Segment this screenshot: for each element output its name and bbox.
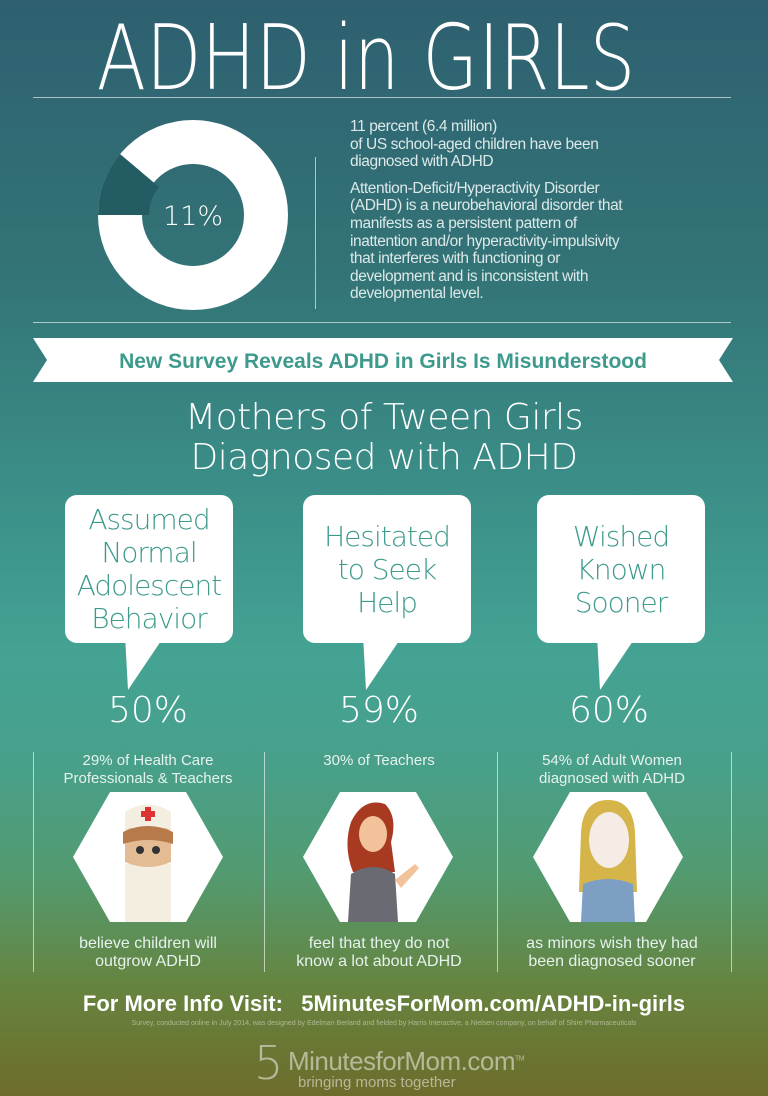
column 1 text xyxy=(64,752,232,787)
subtitle: Diagnosed with ADHD xyxy=(191,437,577,478)
donut chart 11% xyxy=(98,120,288,310)
bubble 1 xyxy=(65,495,233,690)
bubble 1: Adolescent xyxy=(77,569,221,602)
percentages: 50% xyxy=(108,690,188,731)
bubble 3 xyxy=(537,495,705,690)
text: 59% xyxy=(339,690,419,731)
text: statistic and definition xyxy=(350,118,622,302)
column 2 text: 30% of Teachers xyxy=(323,752,435,769)
column 3 text xyxy=(539,752,685,787)
text: statistic and definition: Attention-Deficit/Hyperactivity Disorder xyxy=(350,180,599,197)
logo: bringing moms together xyxy=(298,1074,456,1091)
text: statistic and definition: development and is inconsistent with xyxy=(350,268,588,285)
text: statistic and definition: diagnosed with ADHD xyxy=(350,153,493,170)
logo xyxy=(254,1036,524,1091)
donut chart 11%: 11% xyxy=(163,201,223,232)
column 1 text: Professionals & Teachers xyxy=(64,770,232,787)
logo: 5 xyxy=(254,1036,283,1090)
banner xyxy=(33,338,733,382)
bubble 2 xyxy=(303,495,471,690)
text: statistic and definition: developmental level. xyxy=(350,285,483,302)
text: feel that they do not xyxy=(309,935,449,952)
column 1 text: 29% of Health Care xyxy=(83,752,213,769)
column bottom texts xyxy=(79,935,217,970)
icon: woman hexagon xyxy=(533,792,683,922)
subtitle: Mothers of Tween Girls xyxy=(185,397,583,438)
icon: nurse hexagon xyxy=(73,792,223,922)
text: statistic and definition: that interferes with functioning or xyxy=(350,250,560,267)
bubble 2: Help xyxy=(357,586,417,618)
title: ADHD in GIRLS xyxy=(97,6,635,111)
column 3 text: 54% of Adult Women xyxy=(542,752,682,769)
text: as minors wish they had xyxy=(526,935,698,952)
column bottom texts: outgrow ADHD xyxy=(95,953,201,970)
text: statistic and definition: manifests as a persistent pattern of xyxy=(350,215,577,232)
text: statistic and definition: 11 percent (6.4 million) xyxy=(350,118,497,135)
footer call to action: For More Info Visit: 5MinutesForMom.com/ADHD-in-girls xyxy=(83,991,685,1016)
bubble 3: Sooner xyxy=(575,586,667,618)
bubble 1: Normal xyxy=(101,536,197,569)
text: been diagnosed sooner xyxy=(528,953,696,970)
bubble 1: Behavior xyxy=(91,602,207,635)
bubble 2: Hesitated xyxy=(324,520,450,552)
bubble 1: Assumed xyxy=(88,503,210,536)
text: know a lot about ADHD xyxy=(296,953,462,970)
bubble 3: Known xyxy=(577,552,665,586)
column bottom texts: believe children will xyxy=(79,935,217,952)
source note: Survey, conducted online in July 2014, was designed by Edelman Berland and fielded by Harris Interactive, a Nielsen company, on behalf of Shire Pharmaceuticals xyxy=(132,1020,636,1027)
logo: MinutesforMom.comTM xyxy=(288,1046,524,1076)
icon: teacher hexagon xyxy=(303,792,453,922)
text: statistic and definition: inattention and/or hyperactivity-impulsivity xyxy=(350,233,619,250)
bubble 2: to Seek xyxy=(338,552,436,586)
banner: New Survey Reveals ADHD in Girls Is Misunderstood xyxy=(119,350,647,373)
text: statistic and definition: of US school-aged children have been xyxy=(350,136,598,153)
text: statistic and definition: (ADHD) is a neurobehavioral disorder that xyxy=(350,197,622,214)
text: 60% xyxy=(569,690,649,731)
subtitle xyxy=(185,397,583,478)
column 3 text: diagnosed with ADHD xyxy=(539,770,685,787)
bubble 3: Wished xyxy=(573,520,669,552)
